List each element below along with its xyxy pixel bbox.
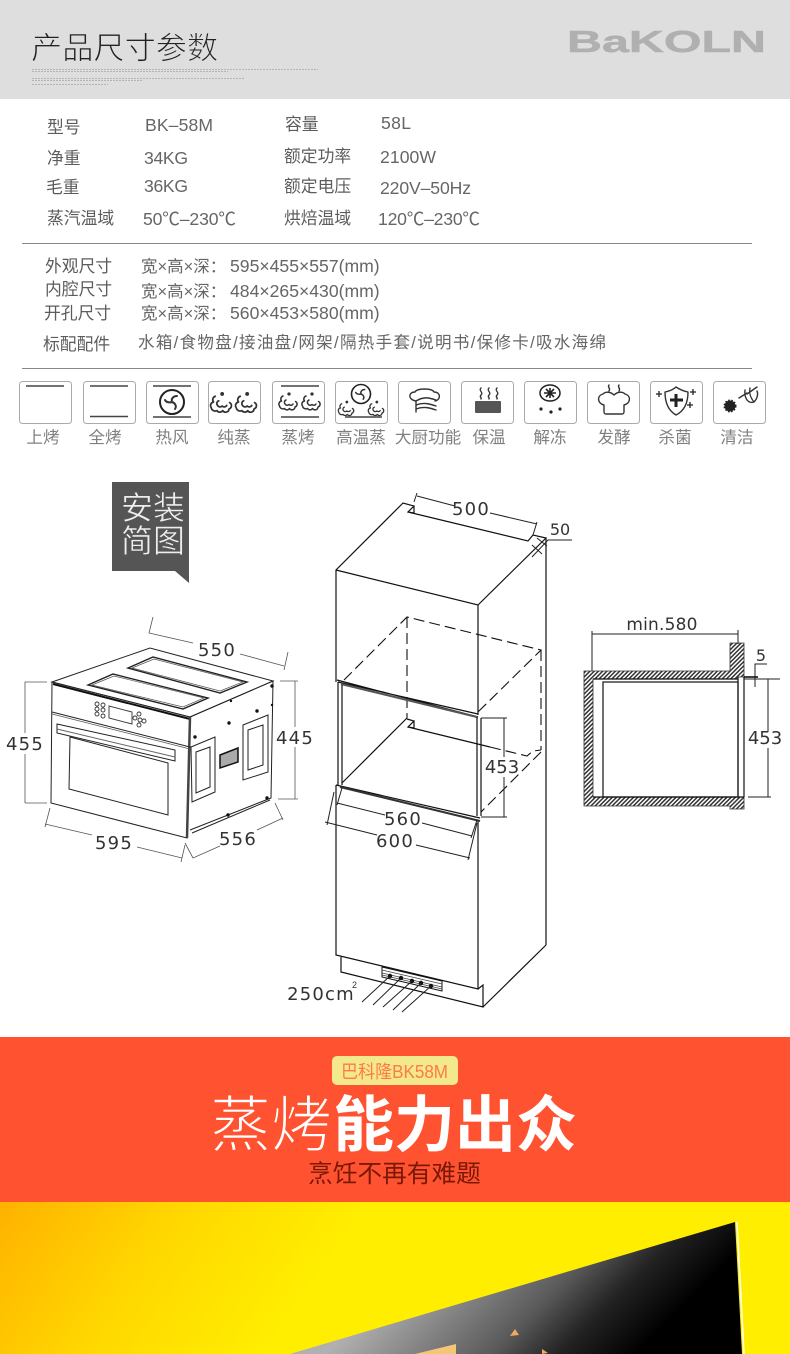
dimension 453 cabinet: 453 xyxy=(485,757,519,778)
icon: fermentation xyxy=(588,382,640,447)
spec table: BK–58M xyxy=(145,115,213,135)
spec table: 36KG xyxy=(144,176,188,196)
spec table: 毛重 xyxy=(46,178,80,197)
dimension 5 xyxy=(744,646,780,687)
panel markers xyxy=(415,1329,548,1354)
dimension 595 xyxy=(45,808,185,862)
yellow product section xyxy=(0,1202,790,1354)
cabinet drawing xyxy=(287,493,572,1012)
dimension min.580: min.580 xyxy=(626,615,698,635)
tiny caption lines xyxy=(32,70,318,84)
icon: fermentation: 发酵 xyxy=(597,428,631,447)
icon: steam bake xyxy=(272,382,324,447)
spec table: 220V–50Hz xyxy=(380,178,471,198)
headline: 能力出众 xyxy=(333,1091,577,1159)
dimension min.580 xyxy=(592,615,738,671)
cutout section drawing xyxy=(584,615,782,809)
spec table: 2100W xyxy=(380,147,436,167)
dimensions and accessories: 560×453×580(mm) xyxy=(230,303,380,323)
label 250cm2: 250cm xyxy=(287,984,355,1005)
dimensions and accessories: 开孔尺寸 xyxy=(44,304,111,323)
dimension 600: 600 xyxy=(376,831,414,852)
dimension 50 xyxy=(532,520,572,557)
dimension 595: 595 xyxy=(95,833,133,854)
icon: top grill: 上烤 xyxy=(26,428,60,447)
dimensions and accessories: 外观尺寸 xyxy=(45,257,112,276)
dimension 500: 500 xyxy=(452,499,490,520)
icon: high temperature steam: 高温蒸 xyxy=(336,428,386,447)
icon: chef hat xyxy=(395,382,461,447)
icon: keep warm: 保温 xyxy=(472,428,506,447)
icon: defrost xyxy=(524,382,576,447)
icon: convection: 热风 xyxy=(155,428,189,447)
cabinet upper section xyxy=(336,503,546,945)
heading tag: installation diagram: 简图 xyxy=(121,523,185,559)
oven body xyxy=(51,648,274,838)
spec table: 34KG xyxy=(144,148,188,168)
dimension 453 cabinet xyxy=(481,718,519,817)
heading tag: installation diagram: 安装 xyxy=(121,490,185,526)
oven glass panel xyxy=(290,1222,742,1354)
spec table: 蒸汽温域 xyxy=(47,209,114,228)
dimensions and accessories: 内腔尺寸 xyxy=(45,280,112,299)
dimension 550: 550 xyxy=(198,640,236,661)
dimensions and accessories: 宽×高×深： xyxy=(141,258,226,276)
dimension 445: 445 xyxy=(276,728,314,749)
spec table: 58L xyxy=(381,113,411,133)
dimension 550 xyxy=(149,617,288,670)
icon: keep warm xyxy=(462,382,514,447)
dimension 50: 50 xyxy=(550,520,570,539)
subheading: 烹饪不再有难题 xyxy=(308,1160,481,1188)
header band xyxy=(0,0,790,99)
dimension 560: 560 xyxy=(384,809,422,830)
headline xyxy=(210,1091,577,1159)
spec table: 额定电压 xyxy=(284,177,351,196)
dimension 5: 5 xyxy=(756,646,766,665)
badge: 巴科隆BK58M xyxy=(341,1062,448,1082)
spec table: 烘焙温域 xyxy=(284,209,351,228)
ventilation grille xyxy=(362,967,442,1012)
label 250cm2: 2 xyxy=(352,980,357,990)
icon: pure steam: 纯蒸 xyxy=(217,428,251,447)
dimension 445 xyxy=(276,681,314,799)
dimension 453 xyxy=(748,679,782,797)
icon: convection xyxy=(146,382,198,447)
icon: top grill xyxy=(20,382,72,447)
dimensions and accessories: 标配配件 xyxy=(43,335,110,354)
spec table: 型号 xyxy=(47,118,81,137)
dimension 556 xyxy=(185,803,283,858)
spec table xyxy=(46,113,480,229)
icon: high temperature steam xyxy=(336,382,388,447)
icon: full grill: 全烤 xyxy=(88,428,122,447)
icon: defrost: 解冻 xyxy=(533,428,567,447)
spec table: 120℃–230℃ xyxy=(378,209,480,229)
icon: sterilize xyxy=(650,382,702,447)
dimension 455: 455 xyxy=(6,734,44,755)
spec table: 50℃–230℃ xyxy=(143,209,236,229)
dimensions and accessories xyxy=(43,256,606,354)
headline: 蒸烤 xyxy=(210,1091,332,1159)
spec table: 额定功率 xyxy=(284,147,351,166)
icon: steam bake: 蒸烤 xyxy=(281,428,315,447)
spec table: 容量 xyxy=(285,115,319,134)
dimensions and accessories: 宽×高×深： xyxy=(141,283,226,301)
dimension 560 xyxy=(337,788,477,838)
icon: cleaning xyxy=(714,382,766,447)
heading tag: installation diagram xyxy=(112,482,189,583)
icon: pure steam xyxy=(208,382,260,447)
dimension 455 xyxy=(6,682,47,803)
dimensions and accessories: 宽×高×深： xyxy=(141,305,226,323)
spec table: 净重 xyxy=(47,149,81,168)
icon: sterilize: 杀菌 xyxy=(658,428,692,447)
dimension 500 xyxy=(414,493,537,535)
title: 产品尺寸参数 xyxy=(31,31,218,66)
icon: full grill xyxy=(84,382,136,447)
dimension 453: 453 xyxy=(748,728,782,749)
cabinet lower section xyxy=(336,785,546,1007)
dimensions and accessories: 595×455×557(mm) xyxy=(230,256,380,276)
oven drawing xyxy=(6,617,314,862)
dimension 600 xyxy=(325,792,477,860)
icon: chef hat: 大厨功能 xyxy=(395,428,461,447)
icon: cleaning: 清洁 xyxy=(720,428,754,447)
function icon row xyxy=(20,382,766,447)
dimensions and accessories: 水箱/食物盘/接油盘/网架/隔热手套/说明书/保修卡/吸水海绵 xyxy=(138,333,606,352)
banner: steam bake ability xyxy=(0,1037,790,1202)
badge xyxy=(332,1056,458,1085)
dimensions and accessories: 484×265×430(mm) xyxy=(230,281,380,301)
logo: BaKOLN xyxy=(567,24,766,59)
dimension 556: 556 xyxy=(219,829,257,850)
